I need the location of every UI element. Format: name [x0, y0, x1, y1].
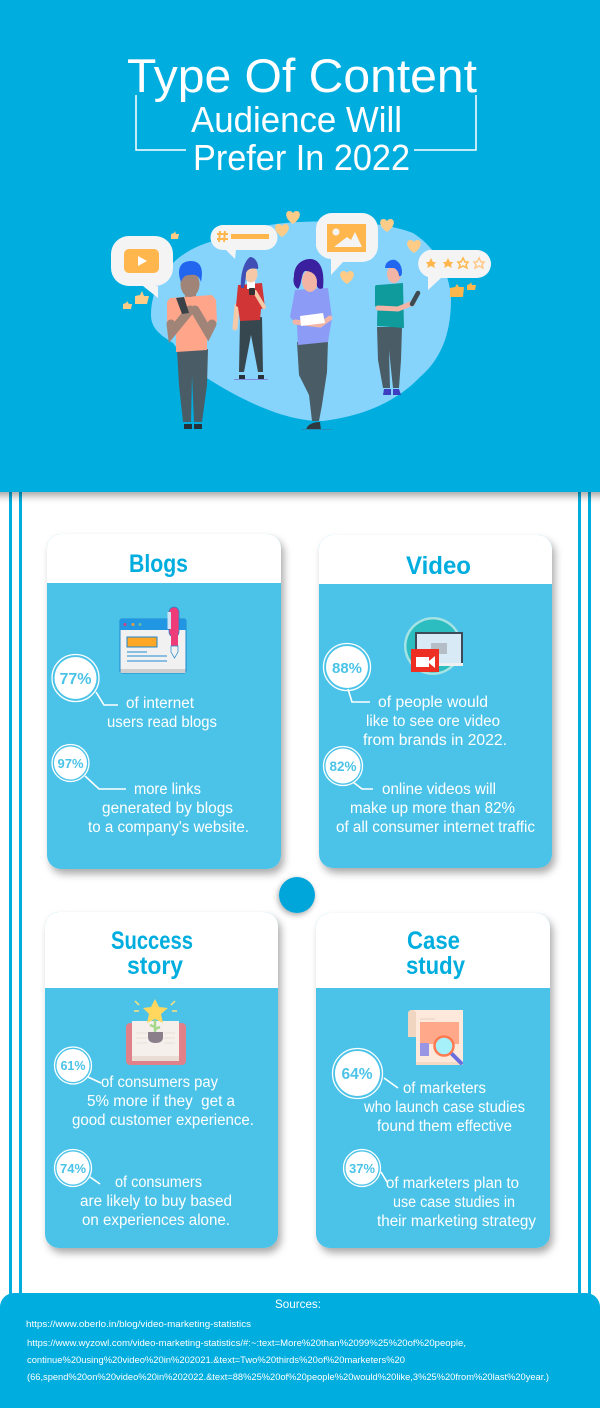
- stat: 74%: [54, 1150, 100, 1186]
- text: 88%: like to see ore video: [366, 713, 500, 730]
- stat: 77%: 77%: [59, 671, 92, 688]
- text: 37%: use case studies in: [393, 1194, 515, 1211]
- heading: [406, 927, 465, 980]
- stat: 88%: 88%: [332, 660, 362, 677]
- speech bubble: video: [111, 236, 173, 298]
- title: Type Of Content: [127, 49, 477, 102]
- heading: Video: [406, 552, 471, 580]
- text: 37%: of marketers plan to: [386, 1175, 519, 1192]
- source links: [26, 1319, 549, 1382]
- stat: 97%: 97%: [57, 756, 84, 771]
- panel: case study: [316, 913, 550, 1248]
- source links: continue%20using%20video%20in%202021.&text=Two%20thirds%20of%20marketers%20: [27, 1355, 405, 1365]
- stat: 82%: [324, 746, 373, 789]
- text: 97%: [88, 781, 249, 836]
- stat: 64%: 64%: [341, 1066, 373, 1083]
- text: 37%: their marketing strategy: [377, 1213, 536, 1230]
- person 3: [290, 259, 332, 430]
- text: 82%: [336, 781, 535, 836]
- person 4: [375, 260, 418, 395]
- speech bubble: image: [316, 213, 378, 275]
- header band: [0, 0, 600, 492]
- text: 64%: [363, 1080, 525, 1135]
- stat: 61%: [54, 1047, 101, 1084]
- icon: open book with star: [126, 999, 186, 1065]
- stat: 88%: [324, 644, 370, 702]
- heading: Blogs: [129, 550, 188, 578]
- text: 77%: [107, 695, 217, 731]
- text: 88%: [363, 694, 507, 749]
- stat: 97%: [52, 744, 126, 789]
- title: Prefer In 2022: [193, 137, 410, 178]
- person 1: [167, 261, 217, 429]
- text: 61%: 5% more if they get a: [87, 1093, 235, 1110]
- icon: video monitor: [404, 617, 463, 675]
- text: 74%: are likely to buy based: [80, 1193, 232, 1210]
- side rails: [9, 490, 591, 1294]
- source links: (66,spend%20on%20video%20in%202022.&text=88%25%20of%20people%20would%20like,3%25%20from%20last%20year.): [27, 1372, 549, 1382]
- illustration: people with social content: [111, 211, 491, 430]
- hearts and thumbs: [123, 211, 476, 309]
- text: 61%: [72, 1074, 254, 1129]
- text: 97%: generated by blogs: [102, 800, 233, 817]
- stat: 82%: 82%: [329, 759, 357, 774]
- text: 77%: of internet: [126, 695, 195, 712]
- icon: blog window with pen: [120, 607, 186, 673]
- text: 64%: of marketers: [403, 1080, 486, 1097]
- text: 61%: of consumers pay: [101, 1074, 218, 1091]
- stat: 77%: [52, 654, 118, 705]
- heading: story: [127, 952, 183, 980]
- text: 88%: from brands in 2022.: [363, 732, 507, 749]
- text: 74%: of consumers: [115, 1174, 202, 1191]
- text: 74%: [80, 1174, 232, 1229]
- text: 82%: of all consumer internet traffic: [336, 819, 535, 836]
- stat: 61%: 61%: [60, 1059, 86, 1073]
- text: 77%: users read blogs: [107, 714, 217, 731]
- text: 61%: good customer experience.: [72, 1112, 254, 1129]
- center dot: [279, 877, 315, 913]
- stat: 37%: [344, 1150, 387, 1186]
- text: 82%: make up more than 82%: [350, 800, 515, 817]
- text: 37%: [377, 1175, 536, 1230]
- heading: Success: [111, 927, 193, 955]
- panel: success story: [45, 912, 278, 1248]
- stat: 64%: [332, 1048, 398, 1098]
- stat: 37%: 37%: [349, 1161, 375, 1176]
- text: 74%: on experiences alone.: [82, 1212, 230, 1229]
- text: 97%: more links: [134, 781, 201, 798]
- speech bubble: star rating: [418, 250, 491, 290]
- title: Audience Will: [191, 99, 402, 140]
- text: 82%: online videos will: [382, 781, 496, 798]
- footer: sources: [0, 1293, 600, 1408]
- panel: blogs: [47, 534, 281, 869]
- heading: study: [406, 952, 465, 980]
- heading: Case: [407, 927, 460, 955]
- source links: https://www.wyzowl.com/video-marketing-statistics/#:~:text=More%20than%2099%25%20of%20people,: [27, 1338, 466, 1348]
- sources heading: Sources:: [275, 1297, 321, 1311]
- person 2: [234, 257, 268, 380]
- source links: https://www.oberlo.in/blog/video-marketing-statistics: [26, 1319, 252, 1329]
- text: 64%: who launch case studies: [363, 1099, 525, 1116]
- stat: 74%: 74%: [60, 1161, 86, 1176]
- panel: video: [319, 535, 552, 868]
- heading: [111, 927, 193, 980]
- background blob: [151, 221, 451, 421]
- speech bubble: hashtag: [210, 225, 278, 259]
- text: 88%: of people would: [378, 694, 488, 711]
- text: 97%: to a company's website.: [88, 819, 249, 836]
- title: [127, 49, 477, 178]
- icon: document with magnifier: [408, 1010, 463, 1065]
- text: 64%: found them effective: [377, 1118, 512, 1135]
